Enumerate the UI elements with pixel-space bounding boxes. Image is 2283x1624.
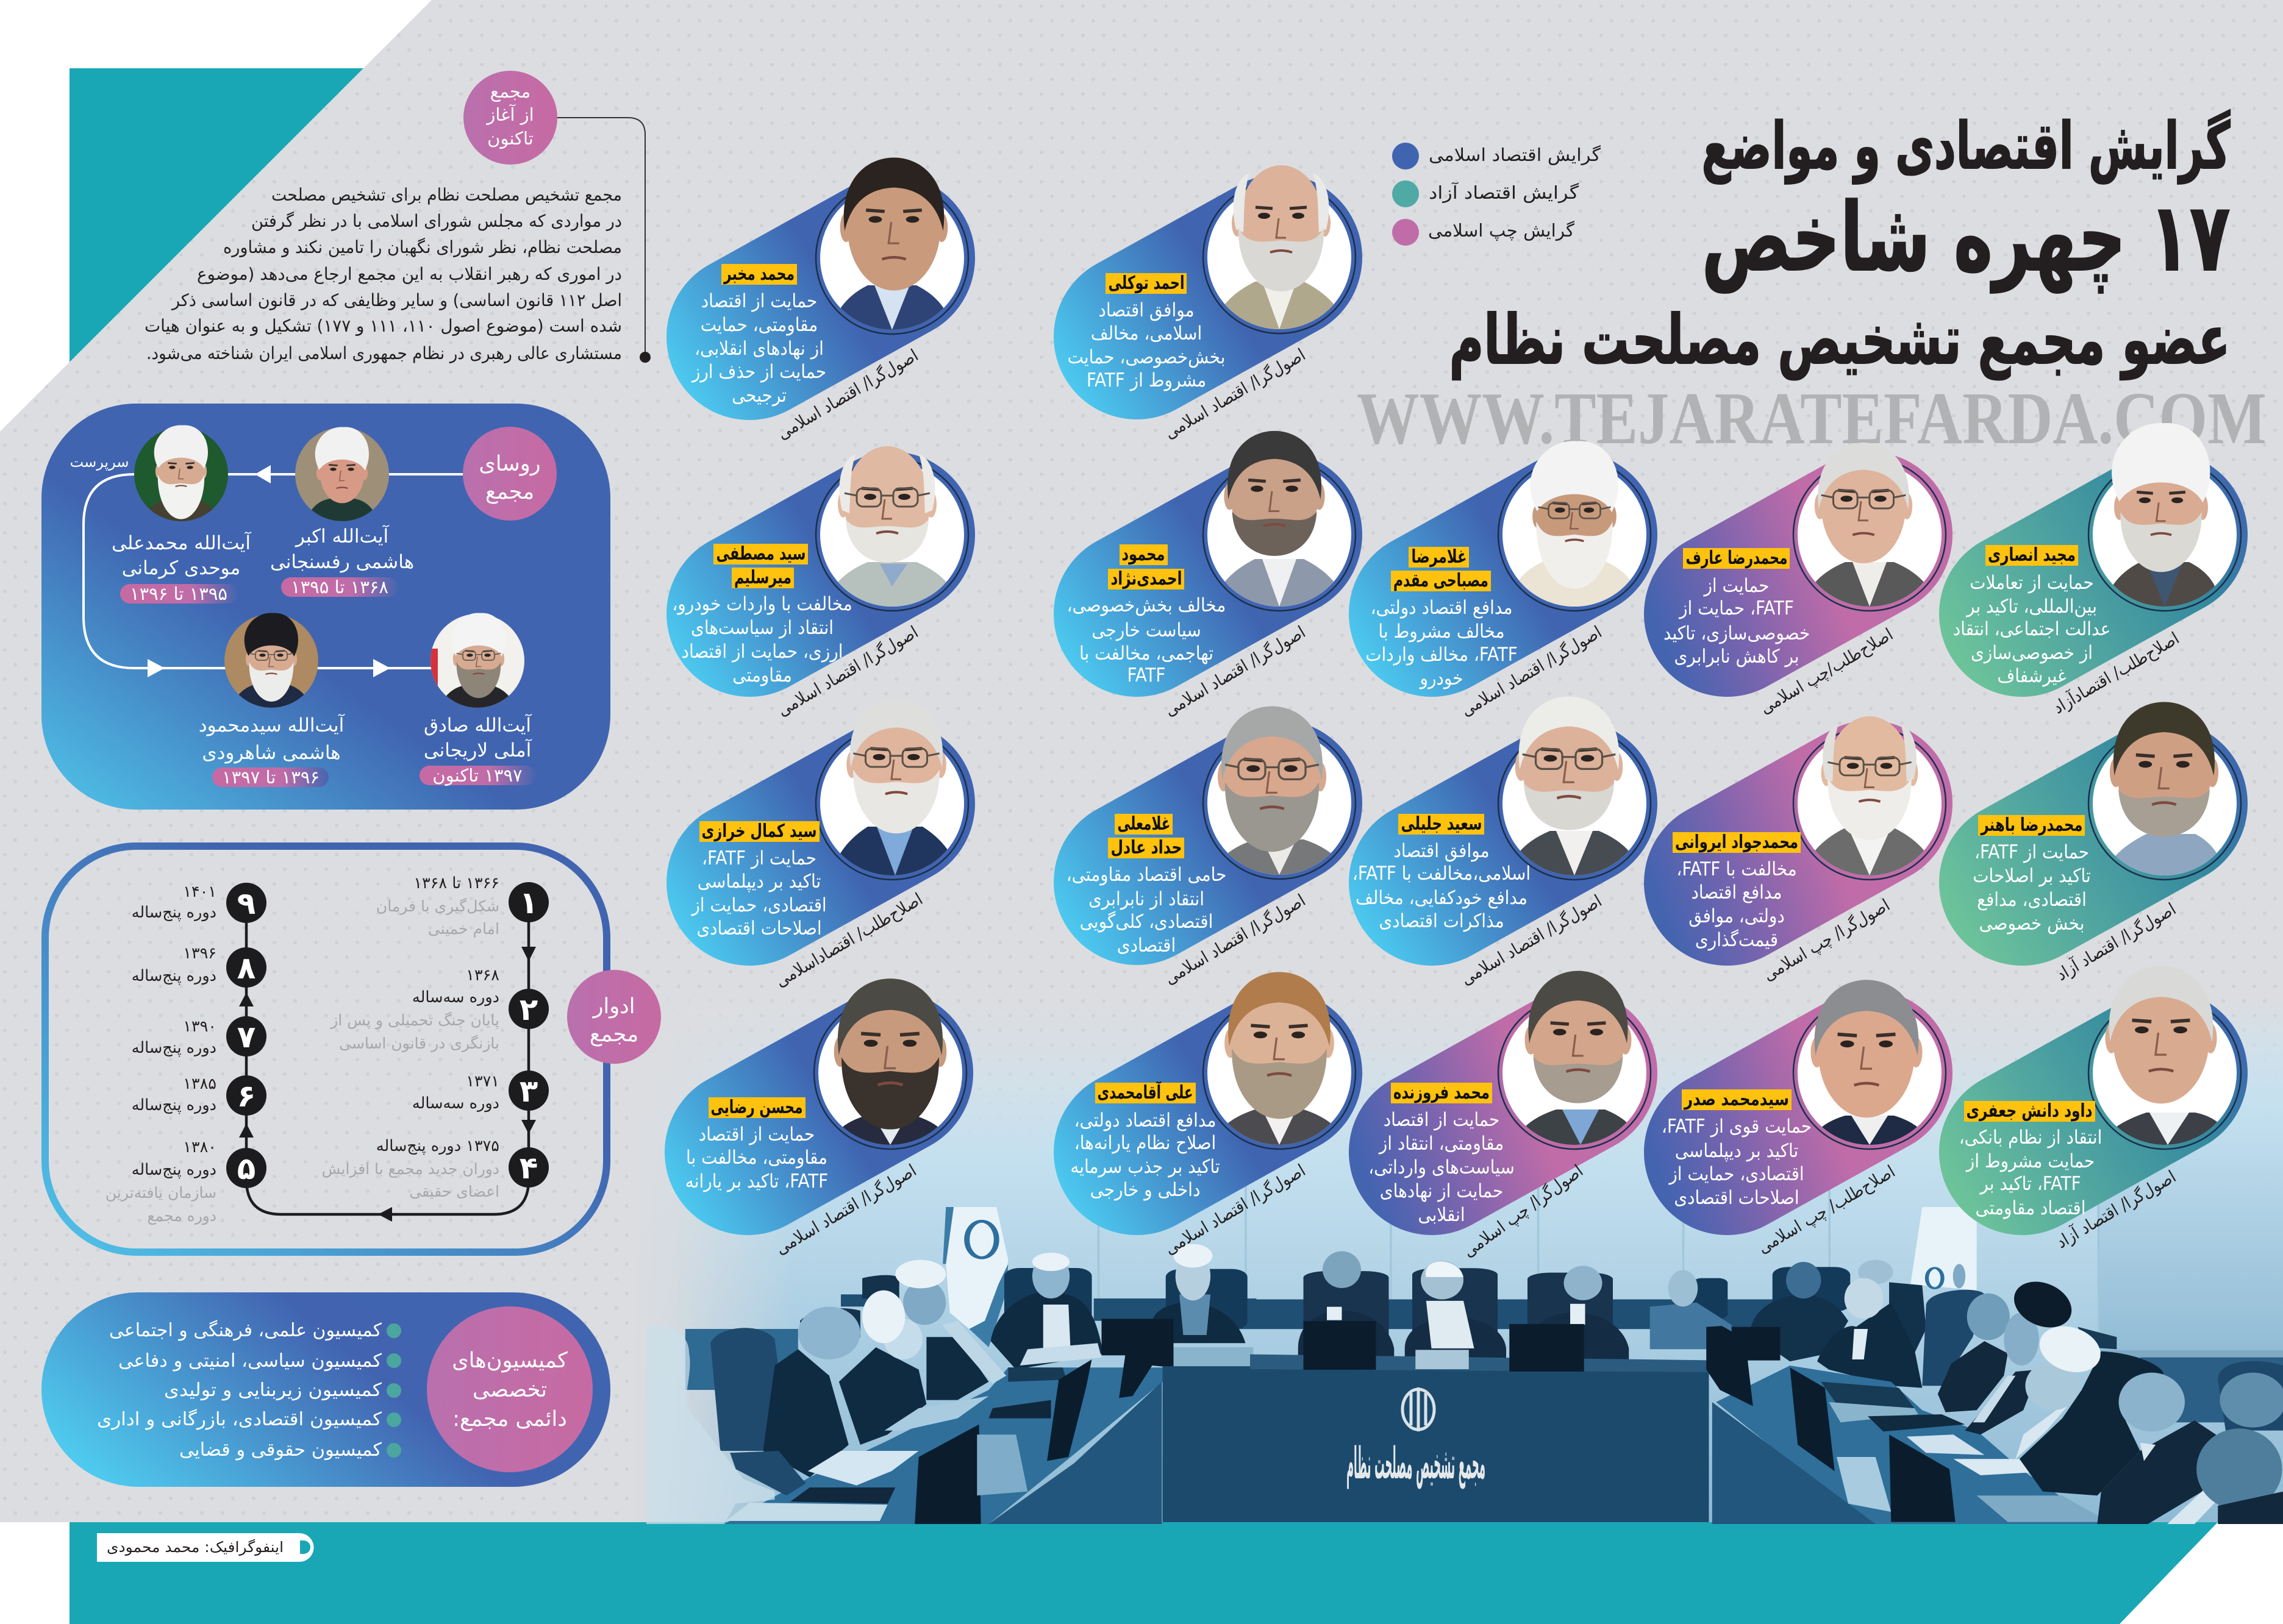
card: Ahmadinejad: [1067, 431, 1356, 721]
timeline text right column: امام خمینی: [428, 920, 499, 938]
card: Tavakoli: [1068, 165, 1356, 443]
name: Kharrazi: سید کمال خرازی: [701, 821, 817, 842]
description: Sadr: تاکید بر دیپلماسی: [1675, 1140, 1798, 1162]
description: Rezaei: حمایت از اقتصاد: [699, 1124, 815, 1145]
timeline text right column: ۱۳۷۵ دوره پنج‌ساله: [376, 1137, 499, 1155]
portrait: Ahmadinejad: [1212, 431, 1346, 608]
tag: Mesbahi: اصول‌گرا/ اقتصاد اسلامی: [1457, 622, 1605, 721]
panel: council heads: روسای: [479, 452, 541, 476]
name: Mesbahi: مصباحی مقدم: [1393, 570, 1488, 591]
card: Aref: [1663, 443, 1946, 718]
portrait: Mokhber: [840, 157, 948, 330]
text: مجمع تشخیص مصلحت نظام: [1346, 1437, 1485, 1489]
portrait: Danesh Jafari: [2098, 966, 2232, 1146]
tag: Tavakoli: اصول‌گرا/ اقتصاد اسلامی: [1161, 344, 1309, 443]
description: Sadr: اقتصادی، حمایت از: [1668, 1163, 1804, 1185]
card: Rezaei: [685, 978, 966, 1259]
name: Mirsalim: میرسلیم: [734, 567, 791, 588]
description: Mokhber: مقاومتی، حمایت: [701, 314, 818, 336]
panel: council heads: موحدی کرمانی: [122, 557, 240, 579]
name: Mokhber: محمد مخبر: [723, 263, 795, 285]
portrait: Sadr: [1809, 980, 1931, 1146]
portrait: Bahonar: [2104, 702, 2226, 877]
timeline text right column: دوران جدید مجمع با افزایش: [322, 1160, 499, 1178]
timeline nodes: ۷: [237, 1019, 255, 1055]
description: Iravani: قیمت‌گذاری: [1695, 929, 1778, 951]
tag: Danesh Jafari: اصول‌گرا/ اقتصاد آزاد: [2053, 1166, 2179, 1252]
panel: council periods: مجمع: [590, 1022, 638, 1047]
intro paragraph: مستشاری عالی رهبری در نظام جمهوری اسلامی ایران شناخته می‌شود.: [146, 343, 622, 363]
description: Mesbahi: FATF، مخالف واردات: [1365, 644, 1518, 666]
timeline text left column: ۱۳۹۰: [183, 1017, 216, 1036]
description: Aghamohammadi: داخلی و خارجی: [1090, 1179, 1200, 1201]
description: Aghamohammadi: تاکید بر جذب سرمایه: [1070, 1156, 1220, 1178]
panel: commissions: [41, 1292, 610, 1487]
portrait: Mesbahi: [1507, 441, 1642, 608]
name: Haddad: غلامعلی: [1117, 813, 1171, 835]
legend: [1392, 143, 1601, 246]
card: Iravani: [1673, 716, 1946, 985]
description: Kharrazi: اصلاحات اقتصادی: [696, 917, 822, 939]
description: Ahmadinejad: FATF: [1127, 664, 1165, 686]
card: Mokhber: [691, 158, 968, 444]
description: Kharrazi: تاکید بر دیپلماسی: [698, 871, 821, 892]
intro paragraph: اصل ۱۱۲ قانون اساسی) و سایر وظایفی که در قانون اساسی ذکر: [171, 290, 622, 310]
description: Ansari: از خصوصی‌سازی: [1971, 642, 2093, 664]
description: Mesbahi: مخالف مشروط با: [1378, 621, 1505, 643]
timeline text right column: ۱۳۶۸: [466, 966, 499, 985]
timeline nodes: ۱: [520, 885, 538, 921]
panel: council heads: ۱۳۹۶ تا ۱۳۹۷: [222, 767, 320, 788]
description: Haddad: اقتصادی، کلی‌گویی: [1080, 911, 1213, 933]
timeline text left column: سازمان یافته‌ترین: [105, 1184, 216, 1202]
timeline text right column: پایان جنگ تحمیلی و پس از: [329, 1011, 499, 1030]
name: Ahmadinejad: [1108, 544, 1184, 589]
name: Ansari: مجید انصاری: [1988, 544, 2076, 566]
description: Bahonar: بخش خصوصی: [1979, 913, 2084, 935]
description: Haddad: انتقاد از نابرابری: [1088, 888, 1204, 910]
tag: Haddad: اصول‌گرا/ اقتصاد اسلامی: [1161, 890, 1309, 989]
name: Forouzandeh: محمد فروزنده: [1393, 1082, 1490, 1103]
card: Aghamohammadi: [1070, 972, 1356, 1259]
intro paragraph: [145, 185, 622, 363]
timeline text left column: دوره پنج‌ساله: [132, 1161, 216, 1179]
panel: council heads: آیت‌الله اکبر: [295, 524, 390, 547]
description: Forouzandeh: حمایت از نهادهای: [1380, 1180, 1503, 1202]
portrait: Tavakoli: [1224, 165, 1334, 329]
portrait: Forouzandeh: [1513, 971, 1642, 1146]
description: Haddad: اقتصادی: [1117, 935, 1176, 956]
name: Tavakoli: احمد توکلی: [1109, 272, 1184, 294]
name: Mirsalim: سید مصطفی: [716, 543, 806, 564]
description: Kharrazi: اقتصادی، حمایت از: [690, 894, 827, 916]
description: Aghamohammadi: اصلاح نظام یارانه‌ها،: [1074, 1132, 1216, 1154]
description: Mokhber: حمایت از اقتصاد: [701, 290, 817, 312]
commission list: کمیسیون حقوقی و قضایی: [179, 1439, 382, 1461]
tag: Forouzandeh: اصول‌گرا/ چپ اسلامی: [1459, 1161, 1587, 1261]
timeline text right column: اعضای حقیقی: [409, 1183, 499, 1200]
callout: majma from start to now: از آغاز: [485, 104, 534, 125]
description: Sadr: اصلاحات اقتصادی: [1674, 1187, 1799, 1209]
description: Mokhber: ترجیحی: [732, 385, 787, 407]
timeline nodes: ۳: [520, 1074, 538, 1109]
callout: majma from start to now: [463, 71, 651, 363]
panel: council heads: ۱۳۹۵ تا ۱۳۹۶: [130, 583, 227, 604]
title: [1449, 109, 2231, 380]
portrait: Movahedi: [134, 425, 228, 523]
description: Aref: خصوصی‌سازی، تاکید: [1663, 622, 1810, 644]
name: Mesbahi: [1391, 546, 1491, 591]
commission list: کمیسیون زیربنایی و تولیدی: [164, 1380, 382, 1401]
panel: council heads: آیت‌الله صادق: [424, 713, 532, 736]
timeline nodes: ۸: [237, 950, 255, 986]
legend: گرایش چپ اسلامی: [1428, 220, 1574, 241]
portrait: Rafsanjani: [295, 427, 389, 523]
timeline text left column: ۱۳۸۰: [183, 1138, 216, 1156]
description: Mesbahi: خودرو: [1418, 668, 1463, 689]
panel: council heads: ۱۳۹۷ تاکنون: [432, 765, 523, 786]
card: Danesh Jafari: [1959, 966, 2241, 1252]
panel: council heads: ۱۳۶۸ تا ۱۳۹۵: [291, 577, 388, 597]
timeline text left column: دوره پنج‌ساله: [132, 1039, 216, 1057]
intro paragraph: در مواردی که مجلس شورای اسلامی با در نظر گرفتن: [251, 211, 622, 231]
teal footer band: [70, 1522, 2218, 1624]
description: Iravani: مدافع اقتصاد: [1692, 881, 1782, 903]
description: Iravani: دولتی، موافق: [1688, 905, 1785, 927]
panel: council periods: ادوار: [592, 994, 635, 1019]
name: Ahmadinejad: احمدی‌نژاد: [1111, 568, 1182, 589]
portrait: Mirsalim: [838, 446, 946, 607]
card: Sadr: [1662, 980, 1946, 1258]
timeline text left column: ۱۳۸۵: [183, 1075, 216, 1093]
name: Jalili: سعید جلیلی: [1401, 813, 1482, 835]
portrait: Rezaei: [829, 978, 951, 1146]
timeline text right column: دوره سه‌ساله: [412, 1094, 499, 1113]
name: Haddad: [1108, 813, 1184, 858]
panel: council heads: هاشمی رفسنجانی: [270, 551, 414, 573]
timeline text right column: [322, 874, 499, 1200]
description: Mirsalim: ارزی، حمایت از اقتصاد: [682, 641, 843, 663]
description: Forouzandeh: سیاست‌های وارداتی،: [1368, 1156, 1515, 1178]
portrait: Jalili: [1507, 697, 1642, 877]
description: Forouzandeh: مقاومتی، انتقاد از: [1378, 1133, 1504, 1155]
photo centre front: table and laptops: [1162, 1321, 1709, 1522]
panel: council heads: هاشمی شاهرودی: [202, 742, 341, 764]
commission list: کمیسیون اقتصادی، بازرگانی و اداری: [97, 1409, 382, 1430]
panel: commissions: کمیسیون‌های: [452, 1348, 568, 1373]
description: Jalili: اسلامی،مخالفت با FATF،: [1352, 863, 1531, 885]
description: Sadr: حمایت قوی از FATF،: [1662, 1116, 1812, 1138]
description: Ansari: عدالت اجتماعی، انتقاد: [1953, 618, 2110, 640]
tag: Bahonar: اصول‌گرا/ اقتصاد آزاد: [2053, 899, 2179, 985]
legend: گرایش اقتصاد آزاد: [1429, 182, 1579, 203]
commission list: [97, 1320, 401, 1461]
timeline text right column: ۱۳۷۱: [466, 1072, 499, 1091]
description: Tavakoli: اسلامی، مخالف: [1091, 322, 1202, 344]
description: Jalili: مذاکرات اقتصادی: [1379, 910, 1504, 932]
panel: council heads: [41, 404, 610, 810]
name: Mesbahi: غلامرضا: [1411, 546, 1467, 568]
tag: Mirsalim: اصول‌گرا/ اقتصاد اسلامی: [774, 622, 921, 721]
intro paragraph: مجمع تشخیص مصلحت نظام برای تشخیص مصلحت: [271, 185, 622, 205]
card: Mesbahi: [1365, 441, 1651, 721]
photo table emblem and logotype: [1346, 1387, 1485, 1489]
commission list: کمیسیون علمی، فرهنگی و اجتماعی: [109, 1320, 382, 1341]
description: Mokhber: از نهادهای انقلابی،: [695, 338, 824, 360]
timeline text left column: ۱۴۰۱: [183, 883, 216, 901]
description: Aghamohammadi: مدافع اقتصاد دولتی،: [1074, 1109, 1216, 1131]
description: Danesh Jafari: اقتصاد مقاومتی: [1975, 1197, 2086, 1219]
name: Ahmadinejad: محمود: [1122, 544, 1165, 565]
description: Forouzandeh: حمایت از اقتصاد: [1384, 1109, 1499, 1131]
description: Danesh Jafari: حمایت مشروط از: [1965, 1150, 2095, 1172]
timeline text right column: ۱۳۶۶ تا ۱۳۶۸: [413, 874, 499, 892]
description: Tavakoli: مشروط از FATF: [1087, 369, 1206, 391]
description: Ahmadinejad: تهاجمی، مخالفت با: [1079, 643, 1213, 664]
portrait: Haddad: [1212, 706, 1346, 876]
portrait: Kharrazi: [831, 700, 959, 877]
card: Haddad: [1066, 706, 1356, 989]
name: Aghamohammadi: علی آقامحمدی: [1098, 1081, 1193, 1103]
description: Tavakoli: موافق اقتصاد: [1098, 299, 1195, 321]
description: Ahmadinejad: سیاست خارجی: [1091, 619, 1201, 641]
portrait: Aghamohammadi: [1212, 972, 1346, 1146]
name: Danesh Jafari: داود دانش جعفری: [1966, 1100, 2093, 1122]
description: Rezaei: FATF، تاکید بر یارانه: [685, 1170, 828, 1192]
description: Mirsalim: مخالفت با واردات خودرو،: [672, 593, 852, 615]
tag: Jalili: اصول‌گرا/ اقتصاد اسلامی: [1457, 891, 1605, 989]
timeline nodes: ۶: [237, 1078, 255, 1114]
callout: majma from start to now: تاکنون: [487, 128, 534, 149]
photo: council meeting: [628, 1000, 2283, 1524]
description: Danesh Jafari: انتقاد از نظام بانکی،: [1959, 1127, 2102, 1149]
timeline text left column: دوره پنج‌ساله: [132, 1096, 216, 1114]
tag: Rezaei: اصول‌گرا/ اقتصاد اسلامی: [772, 1160, 920, 1259]
card: Forouzandeh: [1368, 971, 1651, 1261]
description: Jalili: مدافع خودکفایی، مخالف: [1356, 887, 1527, 909]
card: Ansari: [1953, 423, 2241, 718]
description: Ansari: بین‌المللی، تاکید بر: [1965, 596, 2097, 618]
name: Bahonar: محمدرضا باهنر: [1980, 814, 2083, 836]
timeline nodes: ۲: [520, 992, 538, 1027]
portrait: Larijani: [431, 613, 524, 710]
tag: Kharrazi: اصلاح‌طلب/ اقتصاداسلامی: [772, 889, 926, 991]
tag: Sadr: اصلاح‌طلب/ چپ اسلامی: [1754, 1161, 1899, 1258]
panel: council periods: [45, 846, 661, 1252]
timeline path: [239, 902, 536, 1222]
timeline nodes: ۹: [237, 886, 255, 921]
legend: گرایش اقتصاد اسلامی: [1429, 144, 1601, 165]
description: Rezaei: مقاومتی، مخالفت با: [686, 1147, 827, 1169]
description: Kharrazi: حمایت از FATF،: [702, 847, 816, 869]
photo right: flag, seated members, table side: [1650, 1207, 2283, 1524]
timeline text right column: بازنگری در قانون اساسی: [339, 1035, 499, 1052]
name: Sadr: سیدمحمد صدر: [1683, 1089, 1789, 1110]
description: Ansari: حمایت از تعاملات: [1970, 572, 2094, 594]
panel: council heads: سرپرست: [70, 454, 129, 471]
panel: council heads: آملی لاریجانی: [424, 738, 532, 761]
description: Bahonar: حمایت از FATF،: [1974, 841, 2089, 863]
tag: Ahmadinejad: اصول‌گرا/ اقتصاد اسلامی: [1161, 622, 1309, 721]
name: Aref: محمدرضا عارف: [1685, 547, 1788, 569]
portrait: Aref: [1802, 443, 1937, 608]
description: Tavakoli: بخش‌خصوصی، حمایت: [1068, 346, 1225, 368]
photo centre: wall panels, chairs, seated members: [1099, 1158, 2098, 1363]
name: Mirsalim: [713, 543, 808, 588]
callout: majma from start to now: مجمع: [490, 81, 531, 102]
portrait: Ansari: [2104, 423, 2220, 608]
panel: council heads: آیت‌الله سیدمحمود: [199, 713, 345, 736]
description: Forouzandeh: انقلابی: [1418, 1204, 1465, 1226]
timeline nodes: [226, 882, 549, 1188]
description: Aref: FATF، حمایت از: [1678, 597, 1794, 619]
name: Iravani: محمدجواد ایروانی: [1675, 832, 1798, 853]
card: Jalili: [1352, 697, 1651, 989]
intro paragraph: مصلحت نظام، نظر شورای نگهبان را تامین نکند و مشاوره: [223, 237, 622, 257]
description: Bahonar: تاکید بر اصلاحات: [1973, 865, 2091, 887]
credit pill: [97, 1533, 313, 1562]
commission list: کمیسیون سیاسی، امنیتی و دفاعی: [118, 1350, 382, 1372]
panel: commissions: تخصصی: [473, 1378, 547, 1402]
timeline text left column: [105, 883, 216, 1225]
description: Mirsalim: انتقاد از سیاست‌های: [691, 617, 834, 639]
timeline nodes: ۴: [520, 1150, 538, 1186]
name: Rezaei: محسن رضایی: [711, 1097, 802, 1118]
timeline text left column: دوره پنج‌ساله: [132, 967, 216, 985]
tag: Ansari: اصلاح‌طلب/ اقتصادآزاد: [2049, 628, 2182, 718]
description: Ahmadinejad: مخالف بخش‌خصوصی،: [1067, 594, 1226, 616]
tag: Aghamohammadi: اصول‌گرا/ اقتصاد اسلامی: [1161, 1160, 1309, 1259]
description: Iravani: مخالفت با FATF،: [1676, 858, 1797, 880]
intro paragraph: در اموری که رهبر انقلاب به این مجمع ارجاع می‌دهد (موضوع: [197, 264, 622, 284]
panel: commissions: دائمی مجمع:: [452, 1407, 567, 1431]
description: Mokhber: حمایت از حذف ارز: [691, 361, 826, 383]
photo left: flag, seated members, table side: [646, 1207, 1256, 1524]
portrait: Shahroudi: [224, 613, 318, 710]
description: Aref: حمایت از: [1702, 575, 1770, 597]
card: Mirsalim: [672, 446, 968, 721]
name: Haddad: حداد عادل: [1111, 837, 1182, 858]
card: Bahonar: [1973, 702, 2241, 985]
card: Kharrazi: [690, 700, 968, 991]
portrait: Iravani: [1802, 716, 1937, 877]
timeline text right column: دوره سه‌ساله: [412, 988, 499, 1006]
description: Mesbahi: مدافع اقتصاد دولتی،: [1371, 597, 1512, 619]
description: Jalili: موافق اقتصاد: [1393, 840, 1490, 862]
tag: Aref: اصلاح‌طلب/چپ اسلامی: [1756, 624, 1896, 718]
description: Mirsalim: مقاومتی: [732, 664, 792, 686]
panel: council heads: مجمع: [485, 480, 534, 504]
panel: council heads: آیت‌الله محمدعلی: [112, 531, 251, 554]
teal corner top: [70, 68, 363, 362]
timeline text left column: ۱۳۹۶: [183, 944, 216, 963]
description: Aref: بر کاهش نابرابری: [1674, 646, 1799, 668]
tag: Iravani: اصول‌گرا/ چپ اسلامی: [1760, 895, 1893, 985]
description: Ansari: غیرشفاف: [1997, 665, 2067, 687]
timeline text left column: دوره مجمع: [147, 1207, 216, 1225]
timeline text right column: شکل‌گیری با فرمان: [376, 897, 499, 915]
credit pill: اینفوگرافیک: محمد محمودی: [107, 1539, 284, 1556]
tag: Mokhber: اصول‌گرا/ اقتصاد اسلامی: [774, 345, 921, 444]
timeline text left column: دوره پنج‌ساله: [132, 903, 216, 922]
description: Haddad: حامی اقتصاد مقاومتی،: [1066, 864, 1226, 886]
description: Danesh Jafari: FATF، تاکید بر: [1979, 1173, 2081, 1195]
intro paragraph: شده است (موضوع اصول ۱۱۰، ۱۱۱ و ۱۷۷) تشکیل و به عنوان هیات: [145, 316, 622, 336]
timeline nodes: ۵: [237, 1151, 255, 1186]
description: Bahonar: اقتصادی، مدافع: [1977, 889, 2087, 911]
